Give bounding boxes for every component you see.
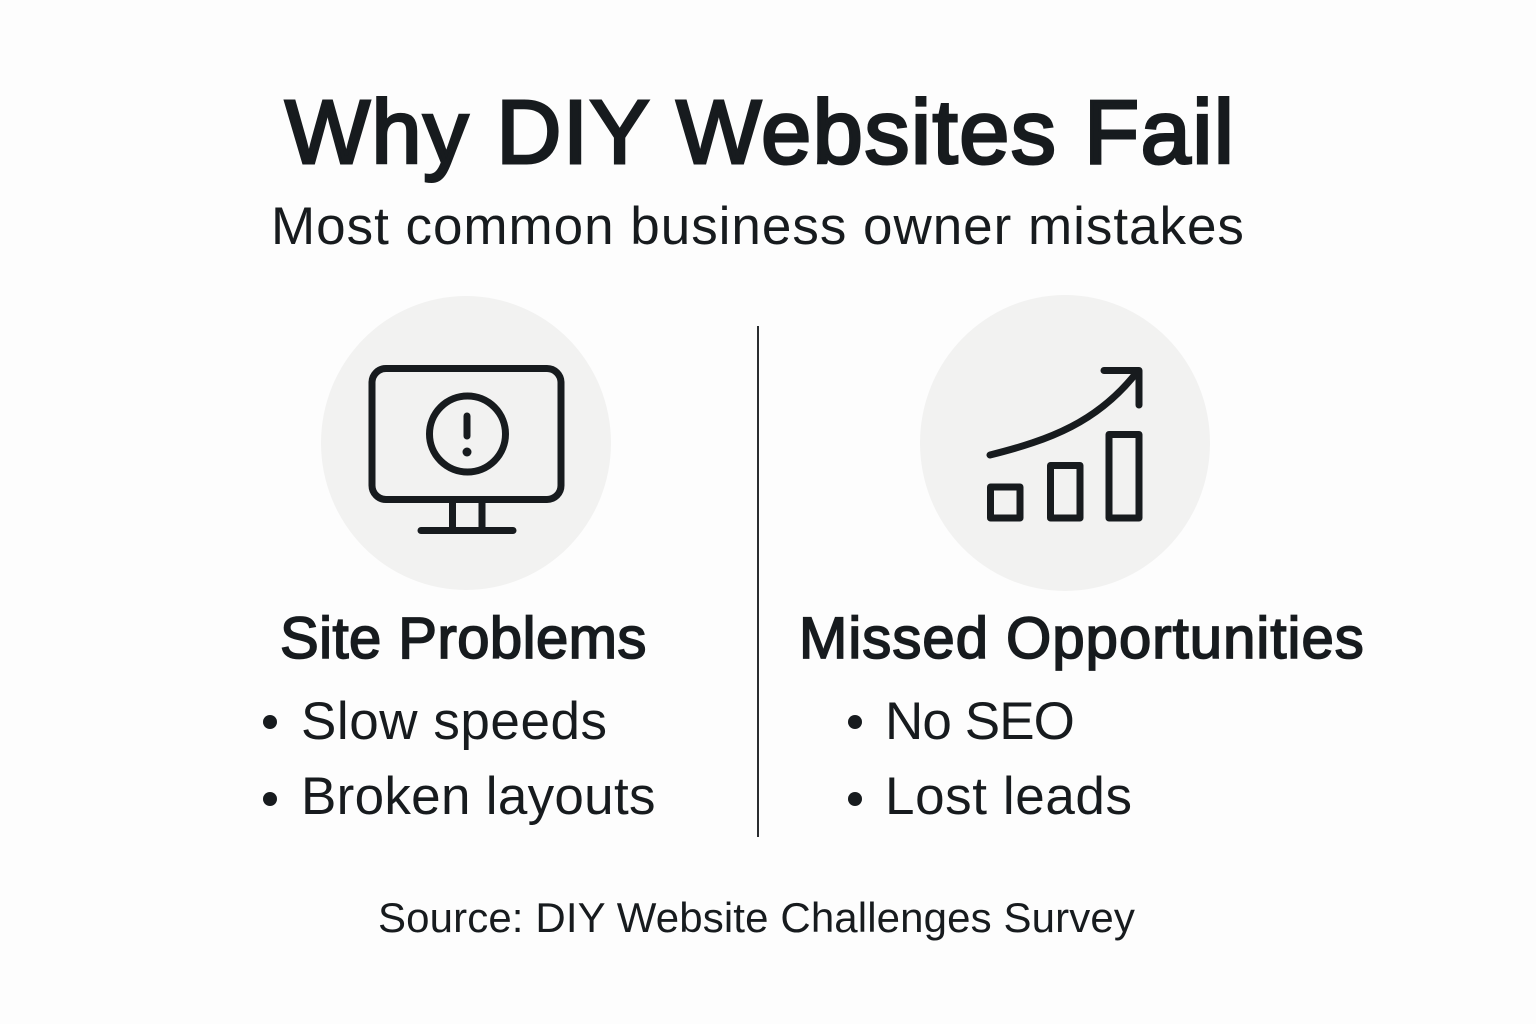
title: Why DIY Websites Fail bbox=[285, 83, 1236, 183]
icon: monitor with warning bbox=[321, 296, 611, 590]
bullet dot bbox=[263, 792, 277, 806]
bullet dot bbox=[848, 715, 862, 729]
bullet dot bbox=[848, 792, 862, 806]
bullet item: lost leads: Lost leads bbox=[885, 767, 1133, 826]
heading: missed opportunities: Missed Opportunities bbox=[799, 606, 1365, 671]
bullet item: broken layouts: Broken layouts bbox=[301, 767, 656, 826]
panel: site problems bbox=[263, 296, 656, 826]
list: site problems bbox=[263, 692, 656, 826]
icon: growth chart bbox=[920, 295, 1210, 591]
bullet dot bbox=[263, 715, 277, 729]
subtitle: Most common business owner mistakes bbox=[271, 197, 1245, 256]
bullet item: no seo: No SEO bbox=[885, 692, 1074, 751]
list: missed opportunities bbox=[848, 692, 1133, 826]
bullet item: slow speeds: Slow speeds bbox=[301, 692, 608, 751]
panel: missed opportunities bbox=[799, 295, 1365, 826]
source note: Source: DIY Website Challenges Survey bbox=[378, 894, 1135, 941]
divider line bbox=[757, 326, 759, 837]
heading: site problems: Site Problems bbox=[280, 606, 647, 671]
